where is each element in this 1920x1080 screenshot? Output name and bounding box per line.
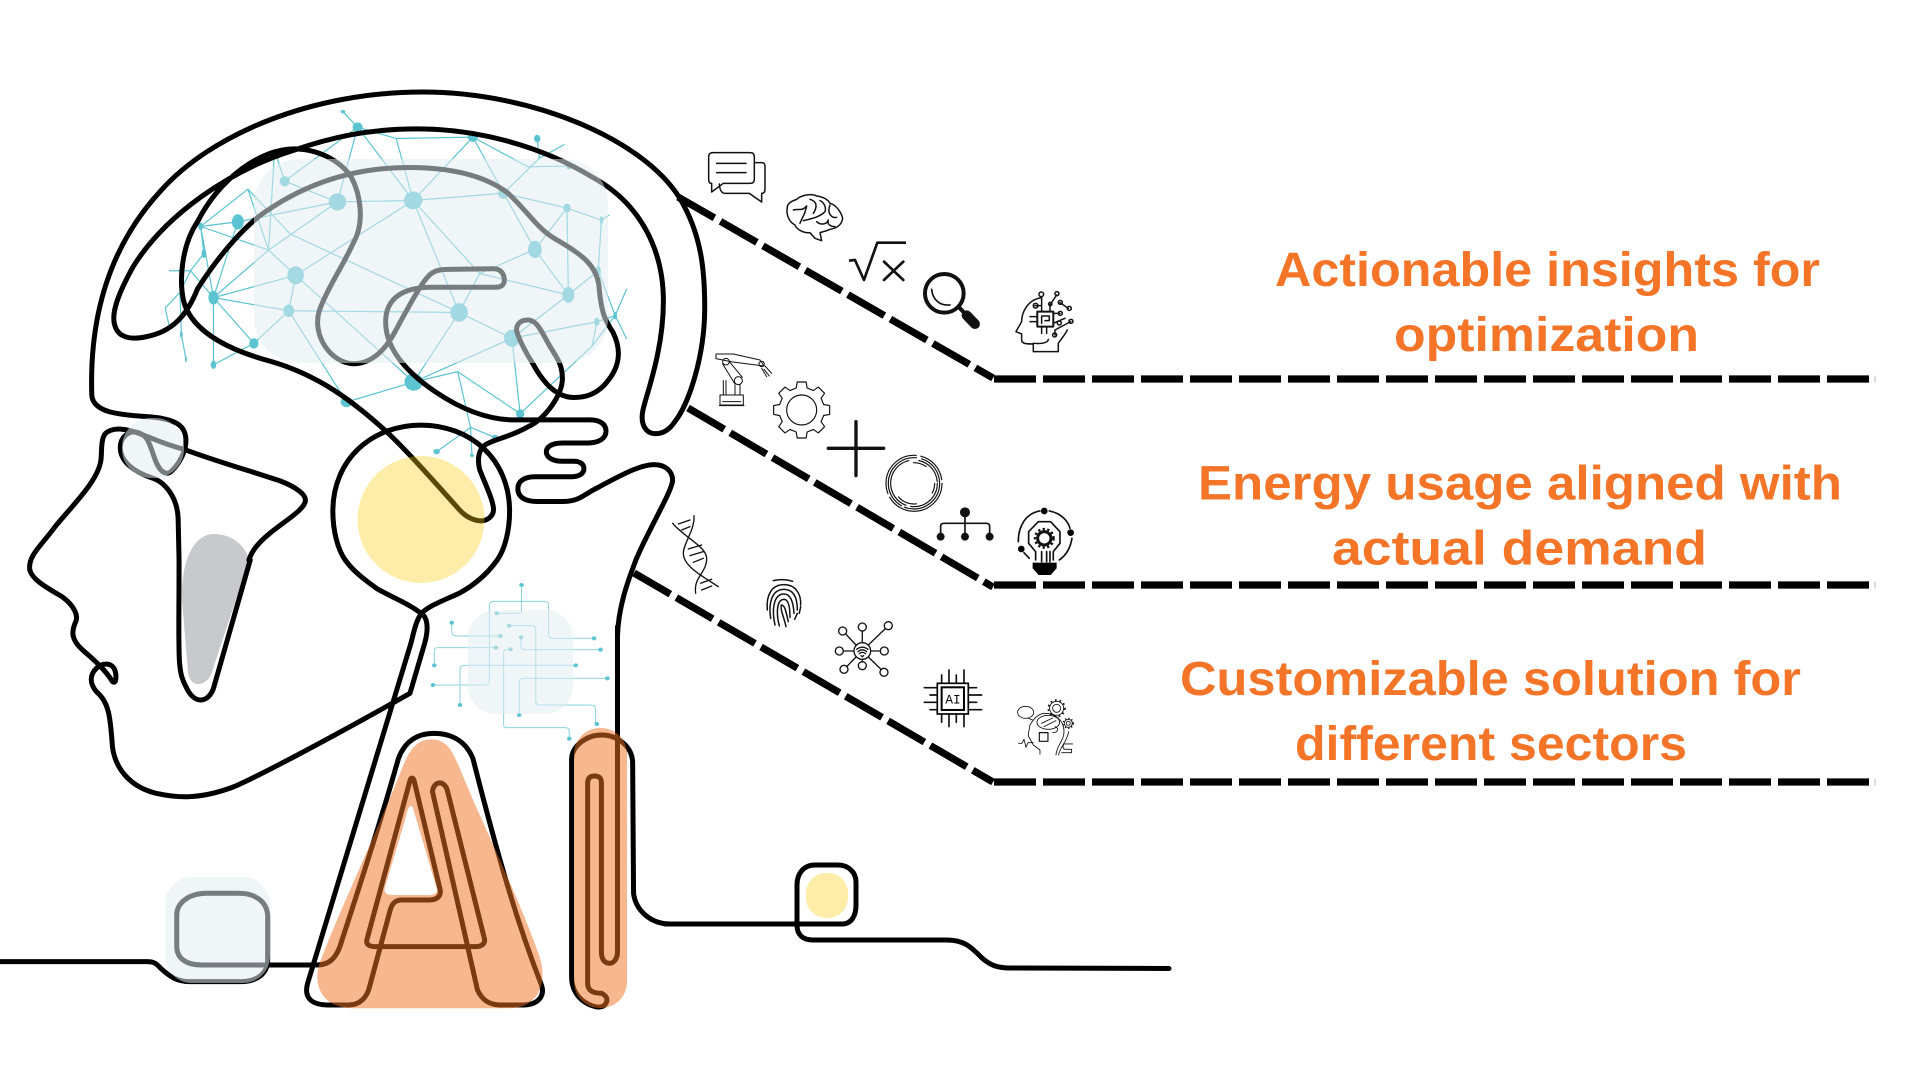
icon: fingerprint [767, 580, 801, 627]
text: energy usage: actual demand [1332, 522, 1707, 576]
icon: head with gears and chip [1018, 700, 1073, 755]
text: actionable insights: Actionable insights for [1275, 244, 1820, 297]
orange letter I fill [574, 728, 627, 1008]
icon: gear [774, 382, 830, 438]
dashed connector 1 [678, 197, 1875, 382]
grey jaw shape [182, 534, 249, 684]
circuit traces [431, 583, 610, 741]
icon: chat bubbles [709, 153, 765, 202]
icon: plus sign [828, 422, 884, 476]
text: energy usage: Energy usage aligned with [1198, 458, 1842, 510]
yellow circle [358, 456, 484, 583]
text: energy usage [1198, 458, 1842, 576]
small square loop and trailing line [665, 865, 1169, 968]
brain neural network [165, 110, 627, 457]
text: customizable solution [1180, 653, 1801, 771]
icon: robot arm [716, 354, 772, 406]
orange letter A fill [317, 739, 543, 1008]
head outline: skull, brain folds and neck [30, 92, 705, 639]
small yellow dot [806, 873, 848, 918]
panel: circuit highlight [468, 610, 573, 714]
text: customizable solution: different sectors [1295, 718, 1687, 771]
panel: rounded square highlight [165, 877, 270, 983]
text: actionable insights [1275, 244, 1820, 362]
text: actionable insights: optimization [1394, 309, 1699, 362]
icon: central node network [835, 622, 892, 676]
dashed connector 2 [688, 408, 1875, 588]
icon: DNA helix [673, 516, 718, 593]
icon row 1 [709, 153, 1073, 352]
icon row 3 [767, 580, 1073, 755]
icon: magnifying glass [925, 274, 975, 324]
panel: brain highlight [254, 159, 608, 363]
panel: ear highlight [122, 418, 184, 478]
icon: brain [787, 195, 843, 241]
dashed connector 3 [634, 573, 1875, 786]
icon: square root of x [849, 243, 906, 280]
icon: light bulb with gear [1018, 508, 1074, 575]
icon: swirl ring [886, 455, 942, 511]
icon: AI chip: AI [945, 693, 961, 708]
icon: AI chip [924, 670, 982, 727]
icon: hierarchy [937, 507, 994, 541]
lower head line, letters A and I, ground line [0, 560, 670, 1007]
icon: AI head with circuits [1016, 292, 1073, 352]
text: customizable solution: Customizable solution for [1180, 653, 1801, 706]
icon row 2 [673, 354, 1074, 593]
